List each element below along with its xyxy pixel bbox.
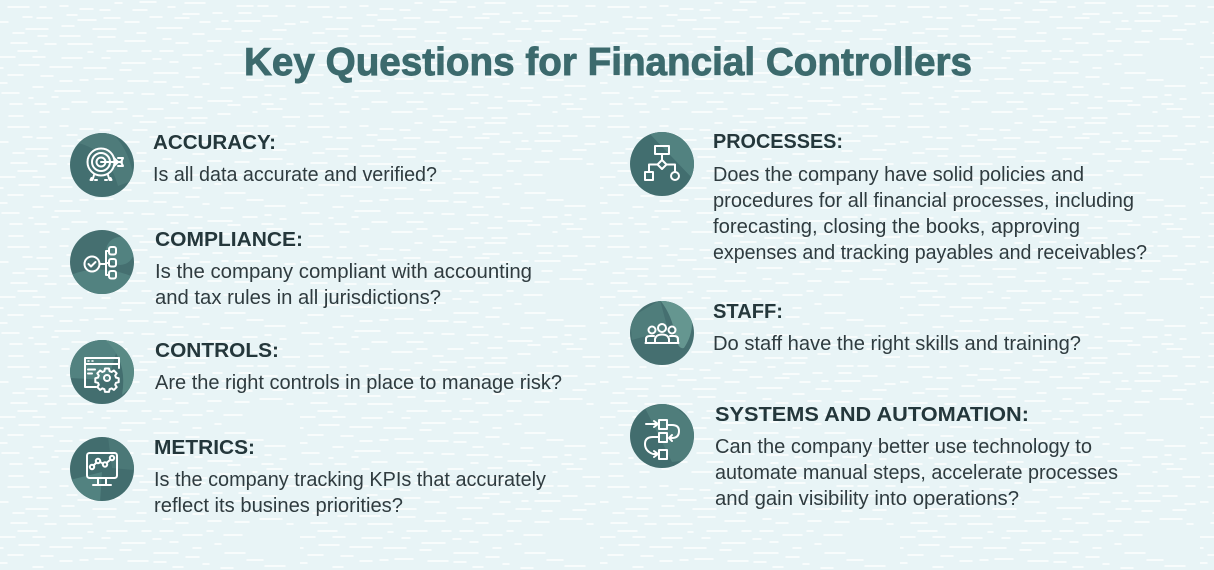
text: processes question: expenses and tracking payables and receivables?: [713, 242, 1147, 264]
icon: flowchart: [630, 132, 694, 196]
item: systems and automation: [630, 402, 1118, 510]
text: controls question: Are the right controls in place to manage risk?: [155, 372, 562, 394]
text: accuracy question: Is all data accurate and verified?: [153, 164, 437, 186]
text: metrics question: [154, 469, 546, 517]
text: systems question: and gain visibility into operations?: [715, 488, 1019, 510]
icon: monitor with line chart: [70, 437, 134, 502]
icon: three people: [630, 298, 694, 365]
item: metrics: [70, 437, 546, 517]
icon: process loop: [630, 402, 696, 468]
text: processes question: forecasting, closing the books, approving: [713, 216, 1080, 238]
text: systems question: [715, 436, 1118, 510]
text: processes question: [713, 164, 1147, 264]
icon: check with tree: [68, 230, 136, 296]
heading: systems and automation: SYSTEMS AND AUTOMATION:: [715, 404, 1029, 426]
text: compliance question: Is the company compliant with accounting: [155, 261, 532, 283]
text: processes question: Does the company have solid policies and: [713, 164, 1084, 186]
text: systems question: automate manual steps, accelerate processes: [715, 462, 1118, 484]
icon: target with arrow: [70, 132, 134, 197]
item: controls: [70, 340, 562, 404]
text: systems question: Can the company better use technology to: [715, 436, 1092, 458]
icon: browser window with gear: [70, 340, 134, 404]
item: processes: [630, 131, 1147, 264]
text: compliance question: [155, 261, 532, 309]
item: compliance: [68, 229, 532, 309]
item: staff: [630, 298, 1081, 365]
heading: compliance: COMPLIANCE:: [155, 229, 303, 251]
text: processes question: procedures for all financial processes, including: [713, 190, 1134, 212]
heading: metrics: METRICS:: [154, 437, 255, 459]
text: compliance question: and tax rules in all jurisdictions?: [155, 287, 441, 309]
heading: processes: PROCESSES:: [713, 131, 843, 153]
text: metrics question: Is the company tracking KPIs that accurately: [154, 469, 546, 491]
text: staff question: Do staff have the right skills and training?: [713, 333, 1081, 355]
heading: controls: CONTROLS:: [155, 340, 279, 362]
title: Key Questions for Financial Controllers: [244, 41, 972, 84]
text: metrics question: reflect its busines priorities?: [154, 495, 403, 517]
heading: accuracy: ACCURACY:: [153, 132, 276, 154]
item: accuracy: [70, 132, 437, 197]
heading: staff: STAFF:: [713, 301, 783, 323]
